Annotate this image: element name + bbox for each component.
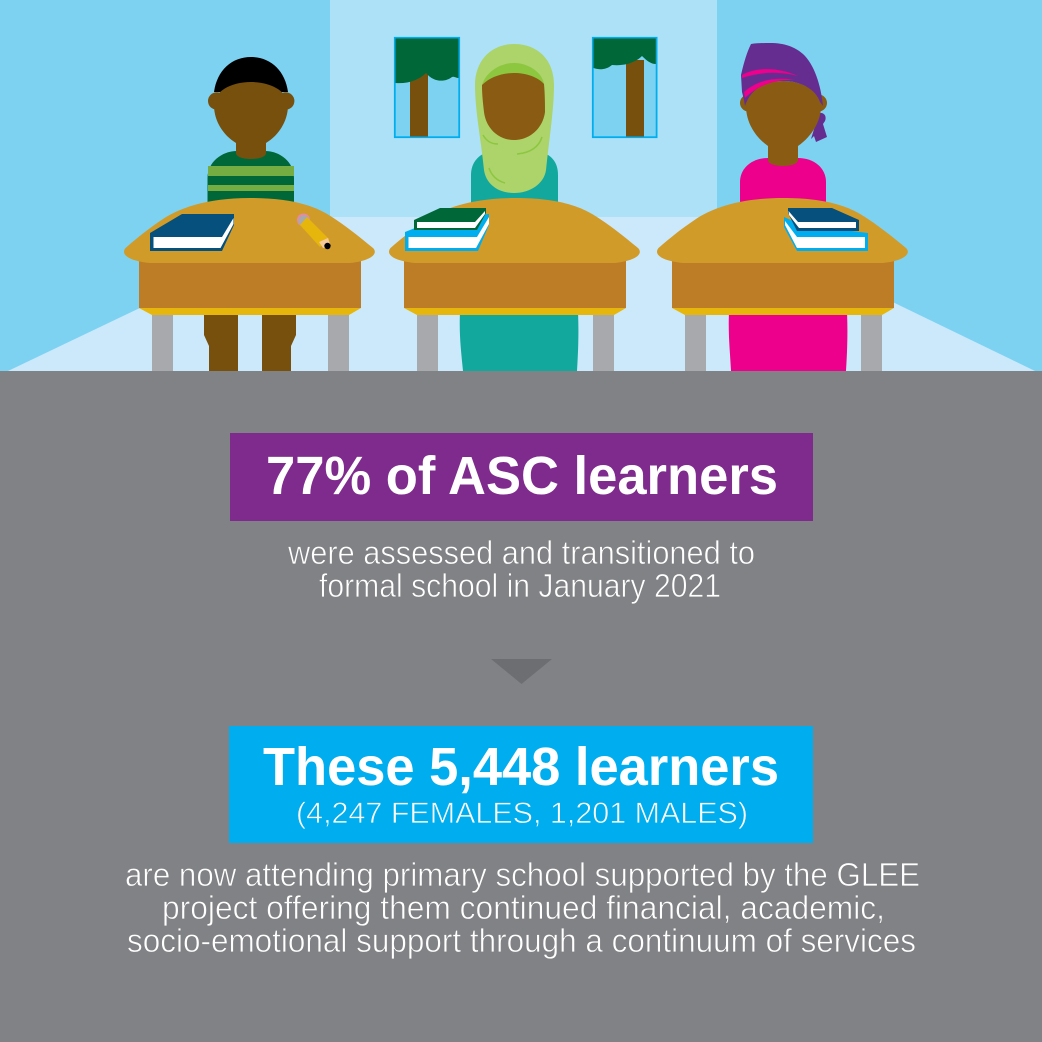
text block: assessed and transitioned: formal school in January 2021 xyxy=(319,567,721,604)
hijab girl lower dress xyxy=(460,312,578,371)
text block: assessed and transitioned: were assessed and transitioned to xyxy=(287,534,755,571)
text block: attending primary school: are now attending primary school supported by the GLEE xyxy=(125,856,920,893)
hijab girl upper dress xyxy=(471,153,558,205)
head wrap knot xyxy=(811,113,827,142)
text block: attending primary school: project offering them continued financial, academic, xyxy=(162,889,885,926)
pink wrap stripes xyxy=(742,69,798,98)
text block: assessed and transitioned xyxy=(287,534,755,604)
blue heading banner: These 5,448 learners xyxy=(263,737,779,797)
panel: classroom scene xyxy=(0,0,1042,371)
desk: left xyxy=(124,198,375,371)
side walls xyxy=(0,0,1042,371)
blue heading banner: (4,247 FEMALES, 1,201 MALES) xyxy=(296,797,748,830)
hijab folds xyxy=(483,135,542,183)
hijab band xyxy=(482,63,544,90)
panel: grey information area xyxy=(0,371,1042,1042)
desk: middle xyxy=(389,198,640,371)
desk: right xyxy=(657,198,908,371)
window: left xyxy=(395,38,459,137)
icon: pencil on left desk xyxy=(297,214,331,249)
purple heading banner: 77% of ASC learners xyxy=(266,446,778,506)
icon: book stack on right desk xyxy=(784,208,868,251)
figure: boy in striped shirt xyxy=(204,57,296,371)
floor xyxy=(8,217,1035,371)
green hijab xyxy=(475,44,554,193)
hijab girl face xyxy=(482,73,545,140)
boy hair xyxy=(214,57,288,92)
pink dress lower xyxy=(729,312,847,371)
icon: book stack on middle desk xyxy=(405,208,489,251)
purple head wrap xyxy=(741,43,823,106)
boy shirt xyxy=(208,151,294,205)
boy head xyxy=(208,82,294,159)
figure: girl in pink dress with head wrap xyxy=(729,43,847,371)
text block: attending primary school: socio-emotional support through a continuum of services xyxy=(127,922,916,959)
figure: girl in green hijab xyxy=(460,44,578,371)
text block: attending primary school xyxy=(125,856,920,959)
pink dress upper xyxy=(740,158,826,205)
head xyxy=(740,81,827,166)
icon: navy book on left desk xyxy=(150,214,234,251)
window: right xyxy=(593,38,657,137)
purple heading banner xyxy=(230,433,813,521)
arrow: down xyxy=(491,659,552,684)
blue heading banner xyxy=(229,726,813,843)
back wall xyxy=(330,0,717,218)
boy legs xyxy=(204,312,296,371)
